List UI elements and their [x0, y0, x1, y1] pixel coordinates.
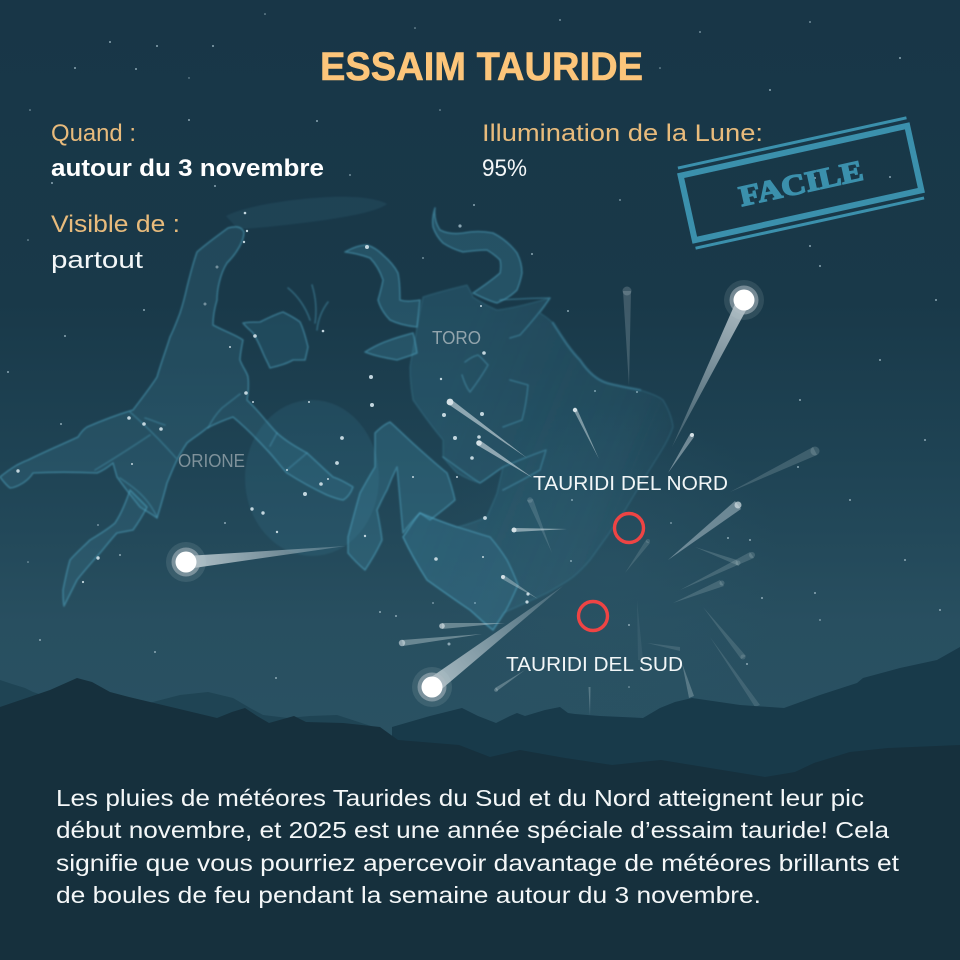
meteors [166, 280, 820, 716]
large meteor left [166, 542, 346, 582]
mountains: mid layer left [0, 680, 420, 760]
bull neck outline [553, 323, 640, 390]
meteor small 10 [501, 575, 538, 599]
body paragraph [56, 785, 900, 908]
paragraph line 1: Les pluies de météores Taurides du Sud et du Nord atteignent leur pic [56, 785, 864, 811]
meteor faint 7 [695, 547, 740, 566]
constellation: Orione [0, 197, 387, 606]
meteor faint 18 [637, 600, 643, 660]
meteor small 3 [573, 408, 599, 459]
meteor faint 6 [673, 580, 724, 603]
meteor vertical low [588, 687, 590, 716]
Orion shield [245, 400, 379, 556]
meteor small 4 [668, 433, 694, 473]
large meteor bottom [412, 586, 563, 707]
bull body and head [403, 285, 673, 630]
meteor faint right [730, 446, 820, 492]
bull right horn [433, 208, 522, 303]
meteor faint 14 [703, 607, 746, 660]
constellation: Toro [345, 208, 673, 630]
meteor small 12 [399, 634, 482, 646]
meteor faint 9 [625, 539, 650, 573]
meteor faint top [622, 286, 632, 386]
meteor small 1 [447, 399, 527, 458]
star field [7, 13, 941, 688]
stamp: difficulty [678, 118, 924, 248]
when label: Quand : [51, 120, 136, 147]
Orion rear leg [63, 490, 147, 606]
radiant glow [440, 400, 780, 740]
meteor faint 17 [682, 663, 694, 698]
bull upper foreleg [348, 422, 455, 570]
stamp word: FACILE [736, 155, 866, 213]
paragraph line 2: début novembre, et 2025 est une année spéciale d’essaim tauride! Cela [56, 817, 890, 843]
moon label: Illumination de la Lune: [482, 120, 763, 147]
stamp outer top line [678, 118, 906, 168]
meteor faint 15 [710, 637, 760, 707]
radiant marker south [578, 602, 608, 630]
paragraph line 4: de boules de feu pendant la semaine autour du 3 novembre. [56, 882, 761, 908]
meteor faint 5 [680, 552, 755, 590]
meteor small 2 [476, 440, 533, 478]
shower label: north: TAURIDI DEL NORD [533, 472, 728, 495]
meteor small 11 [439, 623, 505, 629]
Orion hair [288, 285, 328, 330]
meteor faint 16 [647, 643, 680, 651]
stamp inner border [681, 126, 921, 240]
title: ESSAIM TAURIDE [320, 45, 643, 89]
meteor horizontal [512, 528, 567, 532]
large meteor right [672, 280, 764, 447]
meteor medium right [668, 501, 742, 560]
bull face details [443, 298, 550, 490]
visible value: partout [51, 247, 143, 274]
Orion club [226, 197, 387, 229]
paragraph line 3: signifie que vous pourriez apercevoir davantage de météores brillants et [56, 850, 900, 876]
bull lower leg [403, 513, 518, 630]
meteor faint 8 [527, 497, 552, 553]
constellation stars [16, 212, 530, 604]
radiant marker north [614, 514, 644, 542]
sky background [0, 0, 960, 760]
stamp outer bottom line [696, 198, 924, 248]
mountains: front layer [0, 678, 960, 960]
shower label: south: TAURIDI DEL SUD [506, 653, 683, 676]
moon value: 95% [482, 155, 527, 182]
constellation label: Orione: ORIONE [178, 451, 245, 471]
constellation label: Toro: TORO [432, 328, 481, 348]
mountains: mid layer right [392, 647, 960, 790]
visible label: Visible de : [51, 211, 180, 238]
Orion head [243, 312, 308, 368]
meteor small 13 [494, 670, 525, 692]
when value: autour du 3 novembre [51, 155, 324, 182]
Orion details [95, 394, 307, 517]
Orion raised arm and torso [0, 227, 353, 518]
bull left horn [345, 245, 420, 327]
bull left ear [365, 333, 417, 360]
